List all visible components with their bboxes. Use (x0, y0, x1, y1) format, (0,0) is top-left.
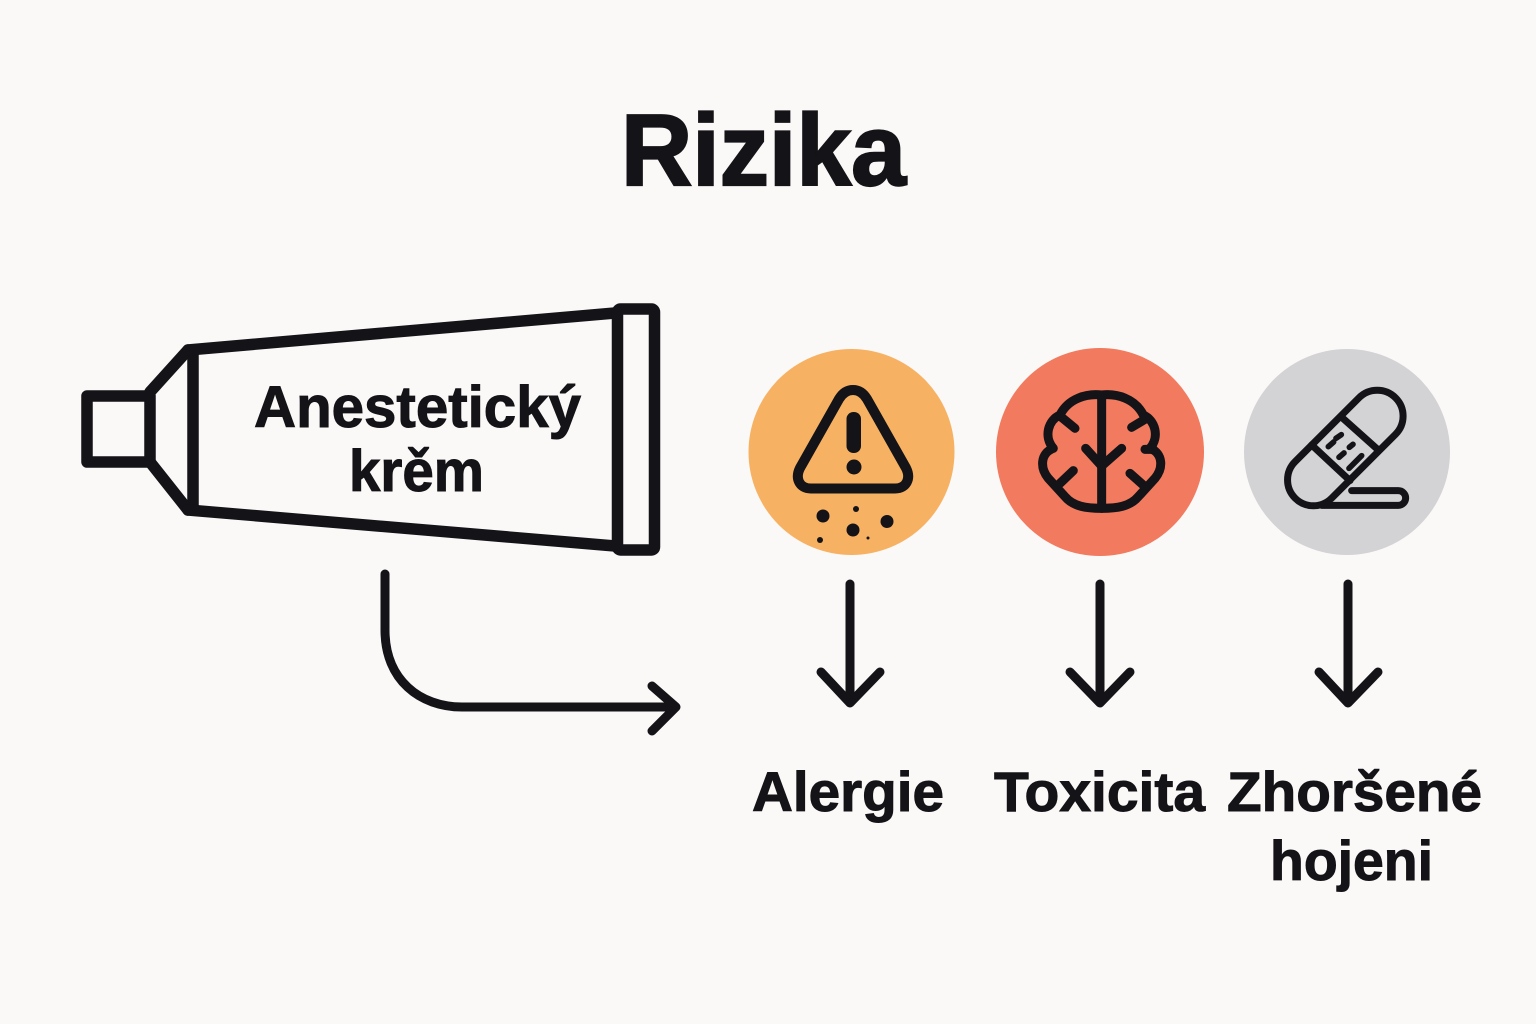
label: impaired healing: hojeni (1270, 829, 1433, 892)
tube label: krěm (349, 439, 484, 504)
icon: allergy warning (748, 349, 954, 555)
label: impaired healing: Zhoršené (1227, 760, 1482, 823)
icon: toxicity brain (996, 348, 1204, 556)
label: impaired healing (1227, 760, 1482, 892)
arrow: down to allergy (821, 584, 880, 703)
arrow: down to healing (1319, 584, 1378, 703)
tube label: Anestetický (254, 375, 581, 440)
icon: anesthetic cream tube (87, 309, 654, 550)
icon: impaired healing plaster (1244, 349, 1450, 555)
title: Rizika (621, 95, 907, 207)
label: allergy: Alergie (752, 760, 944, 823)
arrow: curved from tube to risks (385, 574, 676, 731)
arrow: down to toxicity (1070, 584, 1130, 703)
tube label (254, 375, 581, 504)
label: toxicity: Toxicita (994, 760, 1206, 823)
